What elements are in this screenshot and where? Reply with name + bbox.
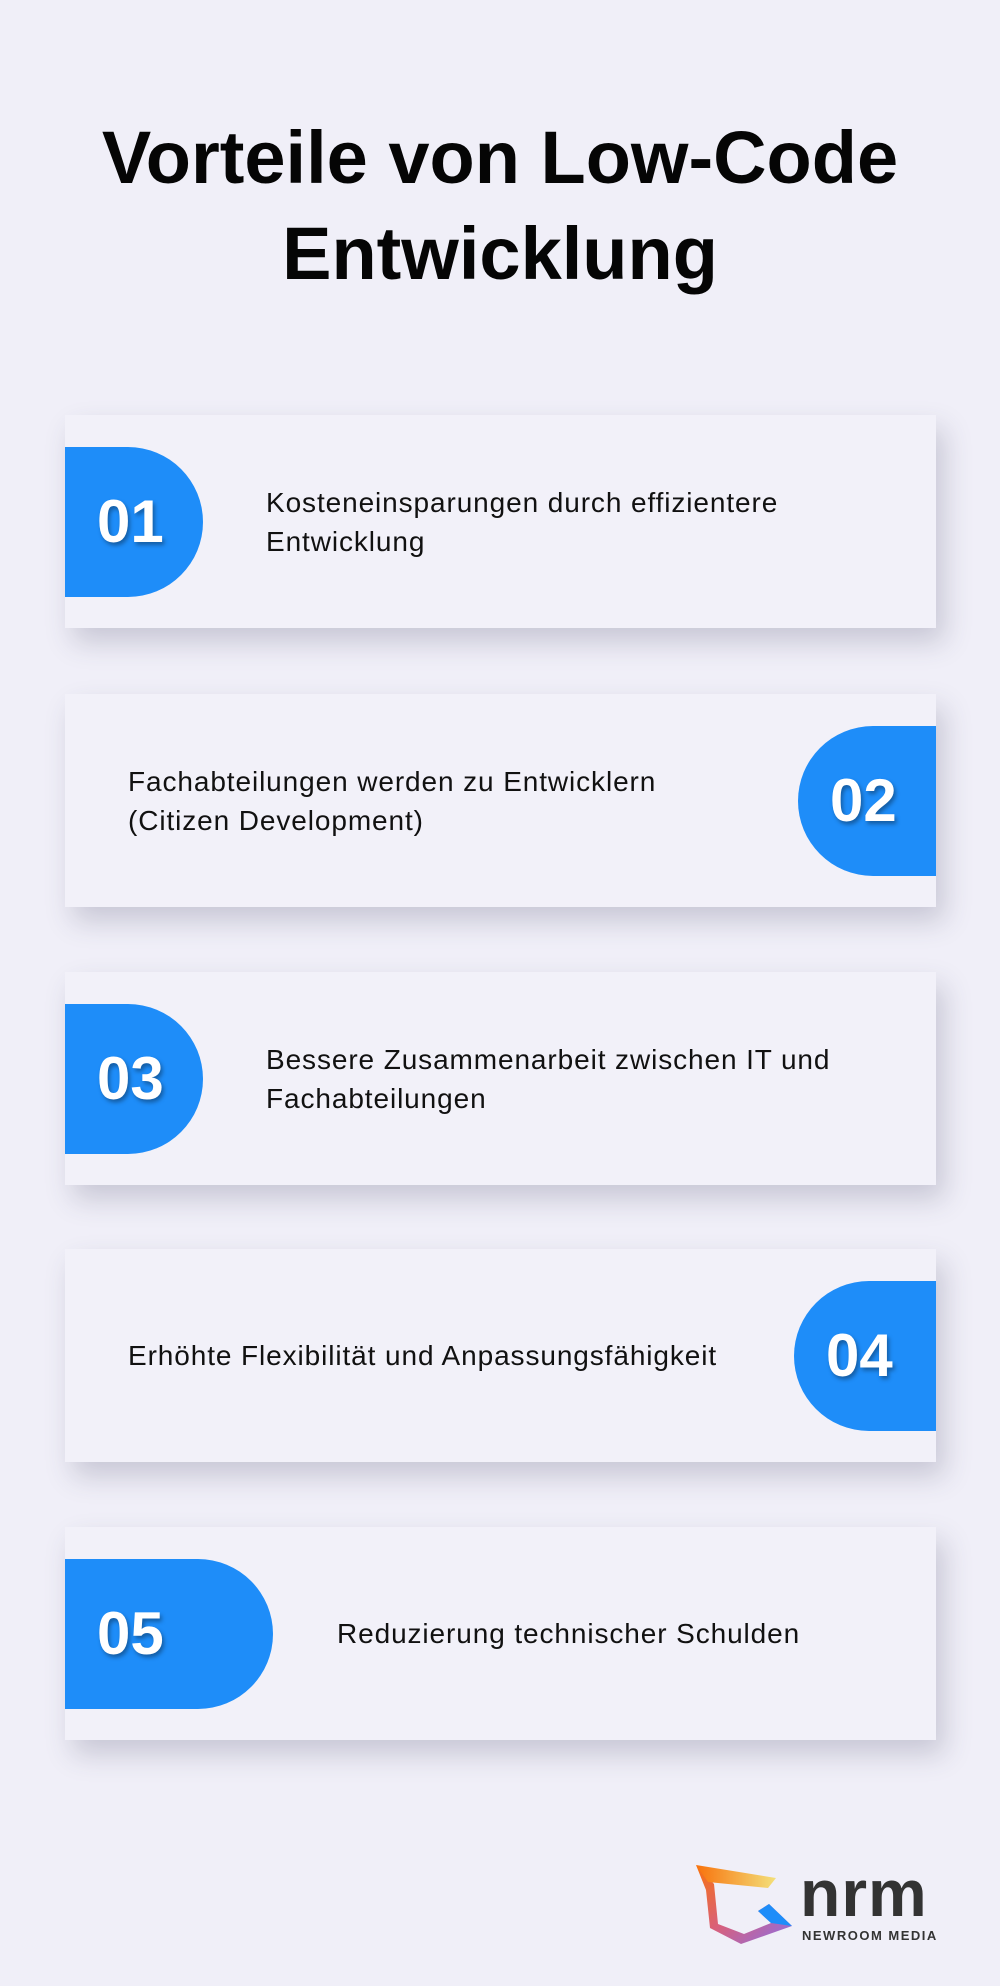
- badge 02: [798, 726, 936, 876]
- logo: [696, 1856, 938, 1944]
- card 04: [65, 1249, 936, 1462]
- title: Vorteile von Low-Code: [102, 116, 898, 199]
- text 03: [266, 1044, 830, 1114]
- card 05: [65, 1527, 936, 1740]
- text 02: [128, 766, 656, 836]
- title: Entwicklung: [282, 212, 718, 295]
- card 02: [65, 694, 936, 907]
- text 05: Reduzierung technischer Schulden: [337, 1618, 800, 1649]
- text 02: (Citizen Development): [128, 805, 424, 836]
- title: [102, 116, 898, 295]
- badge 05: [65, 1559, 273, 1709]
- text 02: Fachabteilungen werden zu Entwicklern: [128, 766, 656, 797]
- logo text: nrm: [800, 1856, 928, 1930]
- badge 03: [65, 1004, 203, 1154]
- card 03: [65, 972, 936, 1185]
- text 03: Fachabteilungen: [266, 1083, 487, 1114]
- badge 04: 04: [826, 1322, 893, 1389]
- icon: logo mark: [696, 1865, 792, 1944]
- badge 01: 01: [97, 488, 164, 555]
- text 01: [266, 487, 778, 557]
- text 03: Bessere Zusammenarbeit zwischen IT und: [266, 1044, 830, 1075]
- text 04: Erhöhte Flexibilität und Anpassungsfähigkeit: [128, 1340, 717, 1371]
- badge 04: [794, 1281, 936, 1431]
- badge 03: 03: [97, 1045, 164, 1112]
- logo: NEWROOM MEDIA: [802, 1928, 938, 1943]
- text 01: Kosteneinsparungen durch effizientere: [266, 487, 778, 518]
- badge 01: [65, 447, 203, 597]
- card 01: [65, 415, 936, 628]
- text 01: Entwicklung: [266, 526, 425, 557]
- badge 05: 05: [97, 1600, 164, 1667]
- badge 02: 02: [830, 767, 897, 834]
